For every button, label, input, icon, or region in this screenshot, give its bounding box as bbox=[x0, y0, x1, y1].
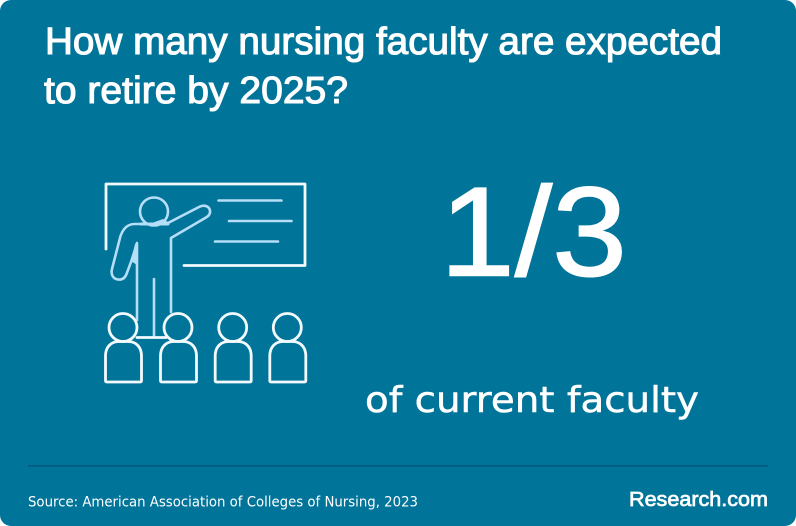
student 3 bbox=[215, 314, 251, 382]
board text lines bbox=[215, 200, 292, 242]
statistic caption: of current faculty bbox=[365, 380, 699, 421]
big statistic: 1/3 bbox=[440, 160, 627, 302]
footer divider bbox=[28, 465, 768, 467]
source note: Source: American Association of Colleges of Nursing, 2023 bbox=[28, 494, 418, 510]
student 1 bbox=[106, 314, 142, 382]
teacher feet bbox=[137, 336, 166, 339]
icon: teacher at board with students bbox=[106, 184, 306, 382]
title: How many nursing faculty are expected bbox=[45, 21, 722, 63]
title: to retire by 2025? bbox=[44, 70, 348, 112]
board outline bbox=[106, 184, 305, 266]
logo: Research.com: Research.com bbox=[629, 488, 768, 511]
teacher figure bbox=[112, 198, 210, 336]
title bbox=[44, 21, 722, 112]
student 2 bbox=[160, 314, 196, 382]
student 4 bbox=[270, 314, 306, 382]
